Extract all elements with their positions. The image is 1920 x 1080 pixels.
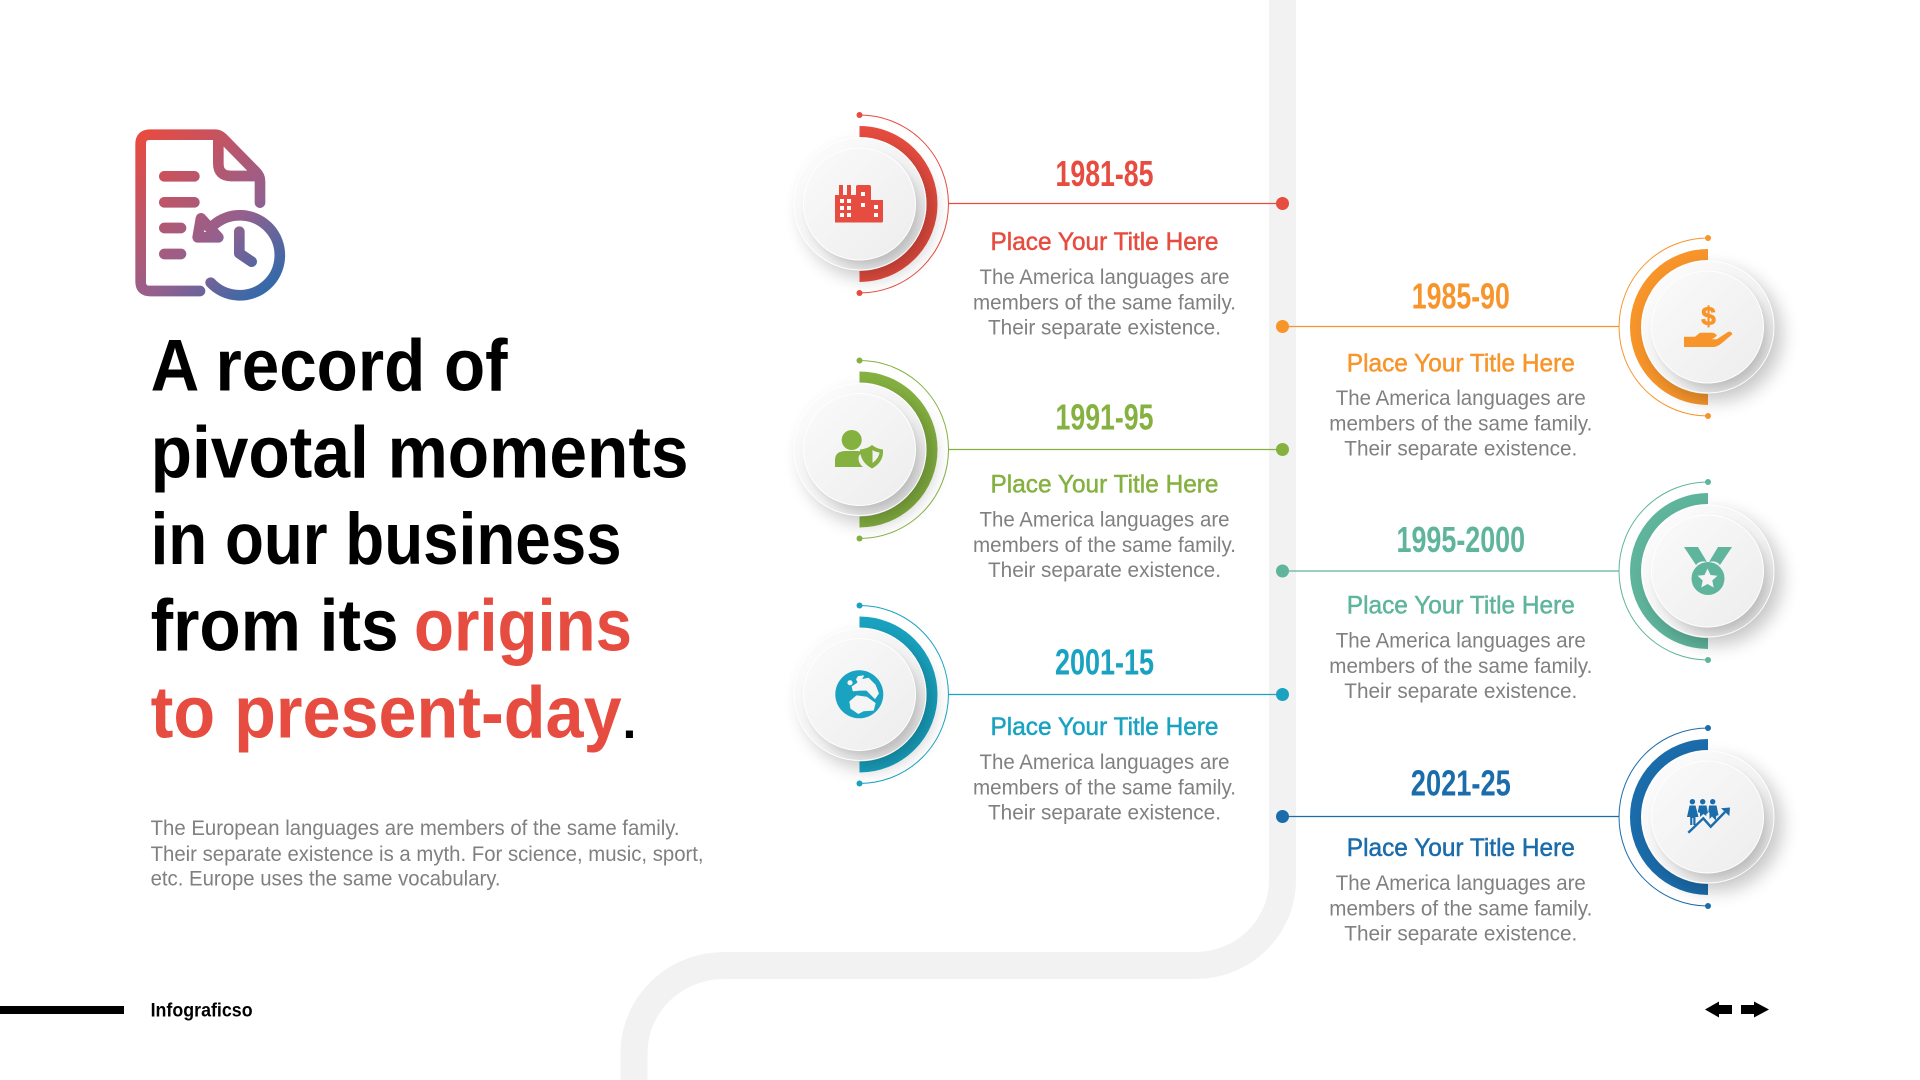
- item title: Place Your Title Here: [1347, 592, 1575, 620]
- intro paragraph: [151, 817, 704, 890]
- item text: members of the same family.: [1329, 897, 1592, 920]
- connector line: [948, 202, 1282, 204]
- title: to present-day: [151, 672, 622, 753]
- item text: Their separate existence.: [1344, 438, 1577, 461]
- timeline dot: [1276, 810, 1289, 823]
- item title: Place Your Title Here: [990, 228, 1218, 256]
- item text: The America languages are: [1336, 630, 1586, 652]
- ring disc: [1619, 235, 1782, 419]
- ring disc: [794, 358, 949, 542]
- item text: [973, 266, 1236, 340]
- item title: Place Your Title Here: [990, 713, 1218, 741]
- panel: 1985-90: [1276, 235, 1782, 461]
- item text: Their separate existence.: [988, 802, 1221, 825]
- item text: Their separate existence.: [1344, 923, 1577, 946]
- item text: The America languages are: [980, 508, 1230, 532]
- timeline dot: [1276, 688, 1289, 701]
- item text: The America languages are: [980, 751, 1230, 774]
- item title: Place Your Title Here: [1347, 350, 1575, 378]
- footer bar: [0, 1006, 124, 1014]
- title: in our business: [151, 499, 622, 580]
- ring disc: [1619, 725, 1782, 909]
- item text: [1329, 872, 1592, 946]
- item text: members of the same family.: [1329, 412, 1592, 435]
- item title: Place Your Title Here: [990, 470, 1218, 498]
- panel: 1991-95: [794, 358, 1289, 582]
- timeline dot: [1276, 564, 1289, 578]
- panel: 2021-25: [1276, 725, 1782, 946]
- item text: Their separate existence.: [988, 559, 1221, 582]
- item text: Their separate existence.: [988, 317, 1221, 340]
- title: pivotal moments: [151, 412, 689, 494]
- title: A record of: [151, 326, 508, 407]
- item text: members of the same family.: [973, 291, 1236, 314]
- year: 2021-25: [1411, 763, 1511, 804]
- item text: Their separate existence.: [1344, 680, 1577, 703]
- ring disc: [794, 602, 948, 786]
- year: 1985-90: [1412, 275, 1510, 316]
- item text: members of the same family.: [973, 776, 1236, 799]
- ring disc: [794, 112, 948, 296]
- title: from its: [151, 585, 399, 666]
- item text: [1329, 387, 1592, 461]
- footer brand: Infograficso: [151, 1000, 253, 1022]
- title: origins: [414, 585, 632, 666]
- item text: members of the same family.: [973, 534, 1236, 557]
- item text: The America languages are: [1336, 387, 1586, 410]
- item text: The America languages are: [980, 266, 1230, 289]
- icon: factory building: [835, 185, 883, 222]
- ring disc: [1619, 479, 1782, 663]
- item text: [973, 751, 1236, 825]
- icon: globe: [835, 670, 883, 718]
- item text: members of the same family.: [1329, 655, 1592, 678]
- title: [151, 326, 689, 753]
- icon: hand with dollar: $: [1701, 301, 1716, 331]
- intro paragraph: Their separate existence is a myth. For science, music, sport,: [151, 843, 704, 866]
- intro paragraph: The European languages are members of the same family.: [151, 817, 680, 840]
- connector line: [1283, 570, 1619, 572]
- year: 1991-95: [1056, 397, 1154, 438]
- timeline dot: [1276, 443, 1289, 456]
- year: 2001-15: [1055, 641, 1154, 682]
- title: .: [622, 693, 636, 749]
- connector line: [1283, 816, 1619, 818]
- connector line: [948, 694, 1282, 696]
- year: 1981-85: [1056, 153, 1154, 194]
- connector line: [1283, 326, 1619, 328]
- item text: The America languages are: [1336, 872, 1586, 895]
- panel: 1981-85: [794, 112, 1289, 340]
- year: 1995-2000: [1396, 519, 1525, 560]
- icon: team with growth arrow: [1687, 799, 1730, 833]
- icon: navigation arrows: [1705, 1002, 1769, 1018]
- item title: Place Your Title Here: [1347, 834, 1575, 862]
- item text: [973, 508, 1236, 582]
- panel: 1995-2000: [1276, 479, 1782, 703]
- item text: [1329, 630, 1592, 703]
- background timeline track: [634, 0, 1282, 1080]
- timeline dot: [1276, 320, 1289, 333]
- intro paragraph: etc. Europe uses the same vocabulary.: [151, 868, 501, 890]
- icon: person with shield: [835, 430, 883, 468]
- panel: 2001-15: [794, 602, 1289, 825]
- timeline dot: [1276, 197, 1289, 210]
- icon: medal: [1684, 547, 1732, 595]
- connector line: [948, 448, 1282, 450]
- icon: document with clock: [141, 135, 280, 295]
- icon: hand with dollar: [1684, 301, 1732, 347]
